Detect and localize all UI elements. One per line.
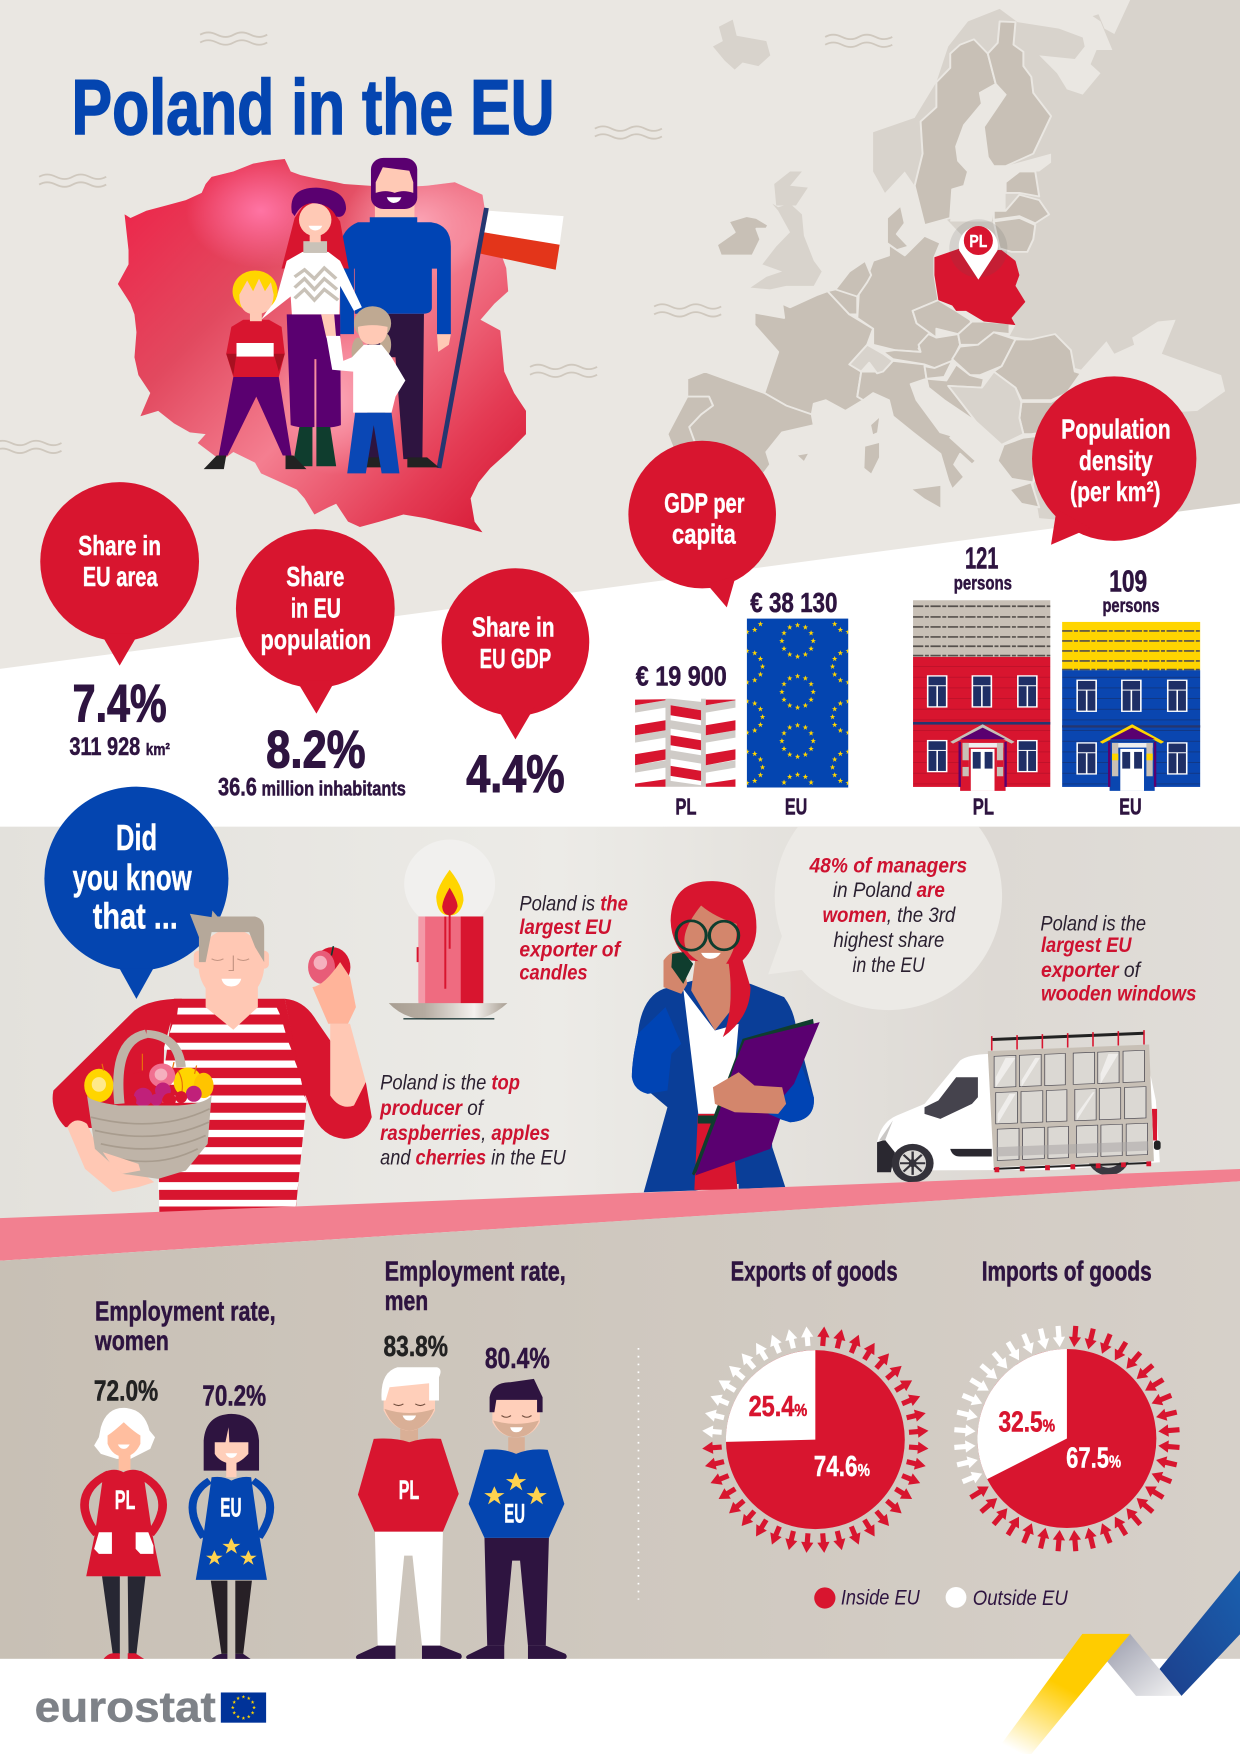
house: EU: 109 [1109, 566, 1147, 599]
text: top producer: and cherries in the EU [380, 1145, 566, 1169]
text: top producer: producer of [379, 1096, 485, 1120]
text: candles: Poland is the [519, 892, 628, 916]
bar: PL: PL [675, 793, 697, 819]
map of Poland [111, 154, 534, 540]
mother [261, 188, 362, 466]
title: Poland in the EU [72, 63, 555, 151]
eurostat logo: eurostat [35, 1685, 216, 1732]
bar: EU: EU [785, 793, 807, 819]
figure: man EU 80.4%: 80.4% [485, 1343, 550, 1375]
map of Europe with Poland highlighted [667, 0, 1240, 536]
bubble: share in EU population: population [261, 624, 371, 655]
legend [814, 1586, 1068, 1610]
figure: woman EU 70.2%: EU [220, 1492, 242, 1522]
bubble: share in EU area: Share in [78, 530, 161, 561]
speech bubble: managers [769, 827, 1002, 1010]
van with window frame [877, 1030, 1161, 1183]
bubble: share in EU population [236, 529, 395, 714]
bar: PL: € 19 900 [636, 660, 727, 691]
employment rate women heading: Employment rate, [95, 1296, 276, 1327]
apple in hand [308, 946, 356, 1024]
text: candles: largest EU [519, 915, 612, 939]
white stats band [0, 503, 1240, 828]
house: PL: persons [954, 574, 1012, 595]
bubble: share in EU GDP: EU GDP [480, 643, 551, 674]
bubble: population density: density [1079, 445, 1153, 476]
stat: EU GDP: 4.4% [466, 745, 565, 804]
text: managers [809, 854, 967, 977]
house: PL [913, 542, 1050, 819]
Poland shape on map [934, 248, 1025, 325]
employment rate men heading: Employment rate, [385, 1256, 566, 1287]
figure: woman PL 72.0% [85, 1376, 163, 1660]
pie chart: exports [702, 1326, 929, 1553]
figure: man EU 80.4%: EU [504, 1498, 525, 1528]
blue bubble: did you know: you know [73, 858, 192, 898]
stat: EU population: 8.2% [266, 720, 366, 779]
text: candles: candles [519, 960, 588, 984]
text: wooden windows: Poland is the [1040, 912, 1146, 936]
wave marks [0, 32, 892, 453]
father [340, 158, 451, 467]
blue bubble: did you know: that ... [93, 896, 178, 936]
stat: EU area [69, 675, 170, 761]
map pin PL: PL [969, 231, 987, 251]
text: top producer: raspberries, apples [380, 1121, 550, 1145]
bubble: GDP per capita [628, 441, 776, 607]
text: managers: highest share [834, 928, 944, 952]
legend: Outside EU [973, 1586, 1068, 1610]
text: wooden windows: exporter of [1041, 958, 1142, 982]
map pin PL [949, 219, 1007, 280]
text: wooden windows: largest EU [1041, 933, 1132, 957]
figure: woman EU 70.2% [193, 1381, 270, 1660]
bar: PL [635, 660, 735, 819]
ribbon: blue, grey and yellow chevron [994, 1571, 1240, 1754]
text: managers: 48% of managers [809, 854, 967, 878]
house: EU: EU [1119, 793, 1142, 819]
house: PL: PL [973, 793, 994, 819]
footer [0, 1659, 1240, 1754]
did you know background panel [0, 827, 1240, 1229]
fruit basket [84, 1034, 214, 1179]
lower stats panel [0, 1181, 1240, 1659]
figure: woman PL 72.0%: PL [115, 1485, 135, 1515]
figure: woman PL 72.0%: 72.0% [94, 1376, 158, 1408]
stat: EU population: 36.6 million inhabitants [218, 774, 406, 801]
house: EU [1062, 566, 1200, 819]
pink diagonal band [0, 1169, 1240, 1261]
boy [204, 270, 306, 469]
text: wooden windows [1040, 912, 1197, 1005]
text: managers: in Poland are [833, 878, 945, 902]
window frame [988, 1030, 1154, 1172]
pie chart: imports [954, 1325, 1180, 1552]
bubble: population density [1032, 376, 1196, 545]
bubble: share in EU GDP [442, 568, 589, 739]
text: wooden windows: wooden windows [1041, 981, 1197, 1005]
bubble: GDP per capita: capita [672, 519, 736, 550]
figure: man PL 83.8%: PL [399, 1475, 419, 1505]
bar: EU: € 38 130 [750, 587, 837, 618]
pie chart: exports: 74.6% [814, 1451, 870, 1483]
text: managers: in the EU [853, 953, 925, 977]
text: candles: exporter of [519, 937, 622, 961]
employment rate women heading [94, 1296, 276, 1356]
bubble: share in EU area: EU area [83, 561, 158, 592]
pie chart: exports: 25.4% [749, 1391, 807, 1423]
bar: EU [746, 592, 848, 815]
businesswoman on phone [632, 881, 820, 1192]
text: candles [519, 892, 628, 984]
bubble: share in EU area [40, 482, 199, 666]
flag of Poland [439, 208, 564, 468]
blue bubble: did you know [44, 787, 228, 999]
bubble: GDP per capita: GDP per [664, 487, 745, 518]
figure: man EU 80.4% [466, 1343, 567, 1660]
Poland map with family [111, 154, 564, 540]
text: top producer [379, 1071, 566, 1169]
exports of goods heading: Exports of goods [731, 1256, 898, 1287]
blue bubble: did you know: Did [116, 818, 157, 858]
text: top producer: Poland is the top [380, 1071, 520, 1095]
bubble: share in EU population: Share [286, 561, 344, 592]
employment rate men heading [385, 1256, 566, 1316]
bubble: population density: (per km²) [1070, 476, 1161, 507]
girl [321, 306, 405, 473]
house: EU: persons [1102, 596, 1159, 617]
candle [389, 839, 507, 1020]
employment rate women heading: women [94, 1325, 169, 1356]
imports of goods heading: Imports of goods [982, 1256, 1152, 1287]
figure: man PL 83.8% [356, 1331, 462, 1660]
bubble: population density: Population [1061, 413, 1171, 445]
figure: woman EU 70.2%: 70.2% [202, 1381, 266, 1413]
stat: EU area: 7.4% [73, 675, 167, 734]
top background [0, 0, 1240, 828]
pie chart: imports: 67.5% [1066, 1443, 1121, 1475]
text: managers: women, the 3rd [822, 903, 956, 927]
stat: EU area: 311 928 km² [69, 734, 170, 761]
man with fruit basket [53, 910, 372, 1214]
population density houses [913, 542, 1200, 819]
employment rate men heading: men [385, 1285, 428, 1316]
bubble: share in EU population: in EU [291, 592, 341, 623]
sleeve and forearm [285, 999, 372, 1139]
house: PL: 121 [965, 542, 998, 575]
head [190, 910, 269, 1030]
bubble: share in EU GDP: Share in [472, 611, 555, 642]
stat: EU population [218, 720, 406, 801]
figure: man PL 83.8%: 83.8% [384, 1331, 448, 1363]
pie chart: imports: 32.5% [998, 1406, 1055, 1438]
GDP per capita bars [635, 592, 848, 815]
legend: Inside EU [841, 1586, 920, 1610]
